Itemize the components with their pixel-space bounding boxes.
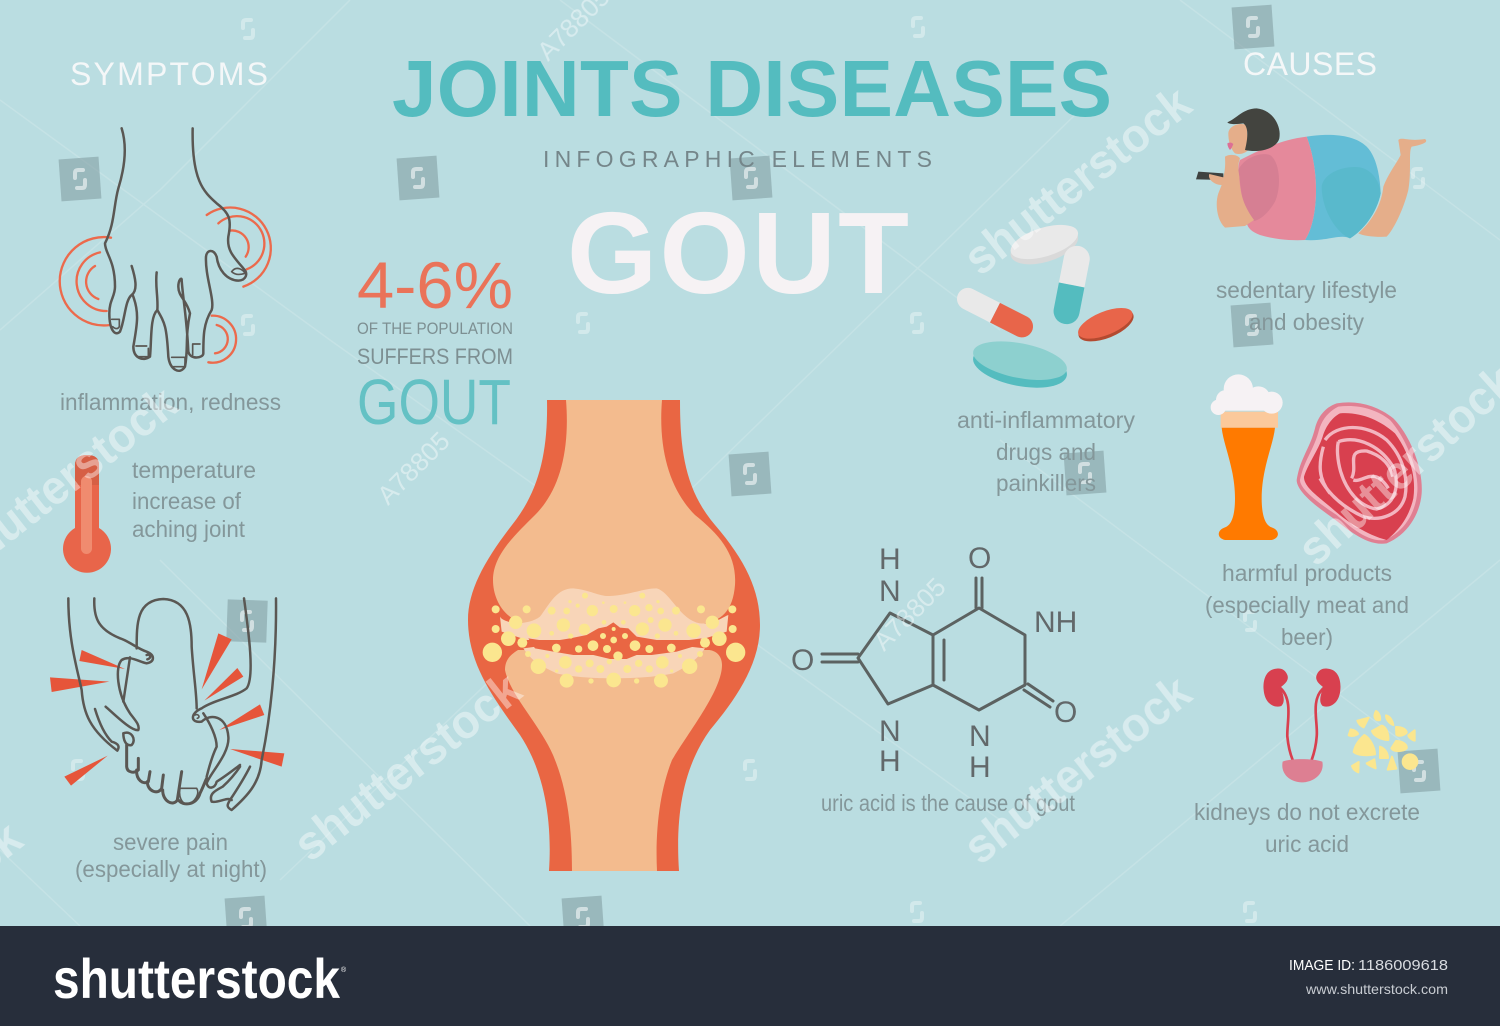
text: temperature increase [132,457,256,542]
footer bar: shutterstock [53,947,341,1010]
chart: uric acid molecule [791,542,1077,784]
icon: inflamed foot [60,128,271,371]
footer bar [0,926,1500,1026]
chart: uric acid molecule: O [1054,696,1077,729]
text: anti-inflammatory drugs: anti-inflammatory [957,407,1135,433]
chart: uric acid molecule: H [879,745,901,778]
text: anti-inflammatory drugs [957,407,1135,496]
text: temperature increase: aching joint [132,516,246,542]
footer bar: www.shutterstock.com [1305,981,1448,997]
icon: uric acid stones [1349,711,1417,772]
text: severe pain: (especially at night) [75,856,267,882]
icon: beer glass [1211,374,1283,540]
subtitle: infographic elements: INFOGRAPHIC ELEMENTS [543,146,932,172]
text: sedentary lifestyle [1216,277,1397,335]
text: inflammation, redness: inflammation, redness [60,389,281,415]
chart: uric acid molecule: N [969,720,991,753]
text: harmful products: harmful products [1222,560,1392,586]
chart: uric acid molecule: H [969,751,991,784]
icon: pills and capsules [953,218,1138,395]
watermark: diagonal text: A78805 [371,426,456,510]
text: harmful products: beer) [1281,624,1333,650]
text: uric acid caption: uric acid is the cause of gout [821,790,1076,816]
watermark: diagonal text: A78805 [867,572,952,656]
text: severe pain: severe pain [113,829,228,855]
footer bar: ® [341,966,347,974]
icon: kidneys and bladder [1263,669,1341,782]
icon: thermometer [63,455,111,573]
panel: causes [1194,108,1426,857]
text: sedentary lifestyle: sedentary lifestyle [1216,277,1397,303]
watermark: diagonal text: shutterstock [284,662,531,872]
text: kidneys: kidneys do not excrete [1194,799,1420,825]
chart: uric acid molecule: O [791,644,814,677]
icon: joint with uric acid crystals [468,400,760,871]
chart: uric acid molecule: O [968,542,991,575]
icon: hands holding painful foot [50,598,284,810]
text: kidneys [1194,799,1420,857]
callout: population statistic: SUFFERS FROM [357,344,513,369]
text: anti-inflammatory drugs: painkillers [996,470,1096,496]
heading: symptoms: SYMPTOMS [70,56,268,92]
callout: population statistic [357,248,513,438]
chart: uric acid molecule: NH [1034,606,1077,639]
icon: raw meat [1297,402,1422,544]
text: severe pain [75,829,267,882]
text: kidneys: uric acid [1265,831,1349,857]
watermark: diagonal text: shutterstock [954,665,1201,875]
footer bar: IMAGE ID: [1289,957,1355,974]
text: harmful products [1205,560,1409,650]
heading: causes: CAUSES [1243,46,1377,82]
footer bar: 1186009618 [1358,957,1448,974]
callout: population statistic: OF THE POPULATION [357,319,513,338]
panel: symptoms [50,128,284,882]
chart: uric acid molecule: N [879,575,901,608]
callout: population statistic: GOUT [357,366,511,438]
chart: uric acid molecule: H [879,543,901,576]
watermark: diagonal text: shutterstock [954,76,1201,286]
title: joints diseases: JOINTS DISEASES [392,44,1112,133]
text: temperature increase: temperature [132,457,256,483]
text: anti-inflammatory drugs: drugs and [996,439,1096,465]
text: temperature increase: increase of [132,488,242,514]
heading: gout: GOUT [567,188,909,318]
text: sedentary lifestyle: and obesity [1249,309,1364,335]
icon: person lying with phone [1196,108,1426,240]
callout: population statistic: 4-6% [357,248,513,322]
chart: uric acid molecule: N [879,715,901,748]
text: harmful products: (especially meat and [1205,592,1409,618]
